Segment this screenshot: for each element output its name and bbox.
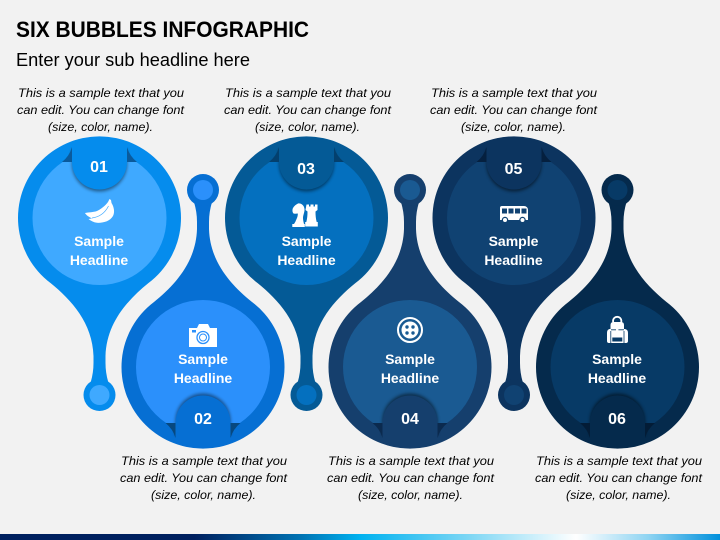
text block 2: (size, color, name).	[151, 488, 256, 502]
headline 1	[70, 233, 128, 268]
icon: camera	[189, 324, 217, 347]
text block 3: can edit. You can change font	[224, 103, 392, 117]
headline 6: Sample	[592, 351, 642, 367]
text block 5	[430, 86, 598, 134]
headline 3: Sample	[282, 233, 332, 249]
headline 4	[381, 351, 439, 386]
text block 4: can edit. You can change font	[327, 471, 495, 485]
headline 5: Sample	[489, 233, 539, 249]
text block 2: This is a sample text that you	[121, 454, 287, 468]
text block 3: This is a sample text that you	[225, 86, 391, 100]
headline 2: Sample	[178, 351, 228, 367]
text block 6: can edit. You can change font	[535, 471, 703, 485]
text block 6: This is a sample text that you	[536, 454, 702, 468]
bottom gradient bar	[0, 534, 720, 540]
text block 5: (size, color, name).	[461, 120, 566, 134]
icon: bus	[500, 206, 528, 223]
bubble 1	[18, 136, 181, 411]
text block 4: (size, color, name).	[358, 488, 463, 502]
text block 5: This is a sample text that you	[431, 86, 597, 100]
headline 3	[277, 233, 336, 268]
bubble 4 shape	[328, 174, 492, 449]
sub headline: Enter your sub headline here	[16, 50, 250, 70]
title: SIX BUBBLES INFOGRAPHIC	[16, 17, 309, 42]
bubble 3 shape	[225, 136, 388, 411]
headline 1: Sample	[74, 233, 124, 249]
number 02: 02	[194, 411, 212, 428]
headline 5	[484, 233, 543, 268]
text block 2	[120, 454, 288, 502]
headline 2: Headline	[174, 370, 232, 386]
headline 3: Headline	[277, 252, 336, 268]
text block 4	[327, 454, 495, 502]
headline 6: Headline	[588, 370, 646, 386]
number 04: 04	[401, 411, 419, 428]
bubble 6 shape	[536, 174, 699, 449]
text block 1: (size, color, name).	[48, 120, 153, 134]
headline 4: Headline	[381, 370, 439, 386]
bubble 2	[121, 174, 284, 449]
headline 4: Sample	[385, 351, 435, 367]
text block 3	[224, 86, 392, 134]
bubble 3	[225, 136, 388, 411]
text block 6: (size, color, name).	[566, 488, 671, 502]
headline 2	[174, 351, 232, 386]
bubble 6	[536, 174, 699, 449]
text block 1: This is a sample text that you	[18, 86, 184, 100]
number 03: 03	[297, 161, 315, 178]
text block 1	[17, 86, 185, 134]
number 06: 06	[608, 411, 626, 428]
text block 4: This is a sample text that you	[328, 454, 494, 468]
icon: backpack	[607, 317, 628, 343]
bubble 4	[328, 174, 492, 449]
number 05: 05	[505, 161, 522, 178]
text block 2: can edit. You can change font	[120, 471, 288, 485]
text block 5: can edit. You can change font	[430, 103, 598, 117]
text block 3: (size, color, name).	[255, 120, 360, 134]
bubble 5 shape	[432, 136, 596, 411]
number 01: 01	[90, 159, 108, 176]
headline 6	[588, 351, 646, 386]
bubble 2 shape	[121, 174, 284, 449]
icon: chess pieces	[292, 203, 318, 227]
icon: button	[398, 318, 422, 342]
icon: banana	[85, 199, 114, 223]
headline 1: Headline	[70, 252, 128, 268]
headline 5: Headline	[484, 252, 543, 268]
bubble 1 shape	[18, 136, 181, 411]
text block 1: can edit. You can change font	[17, 103, 185, 117]
bubble 5	[432, 136, 596, 411]
text block 6	[535, 454, 703, 502]
